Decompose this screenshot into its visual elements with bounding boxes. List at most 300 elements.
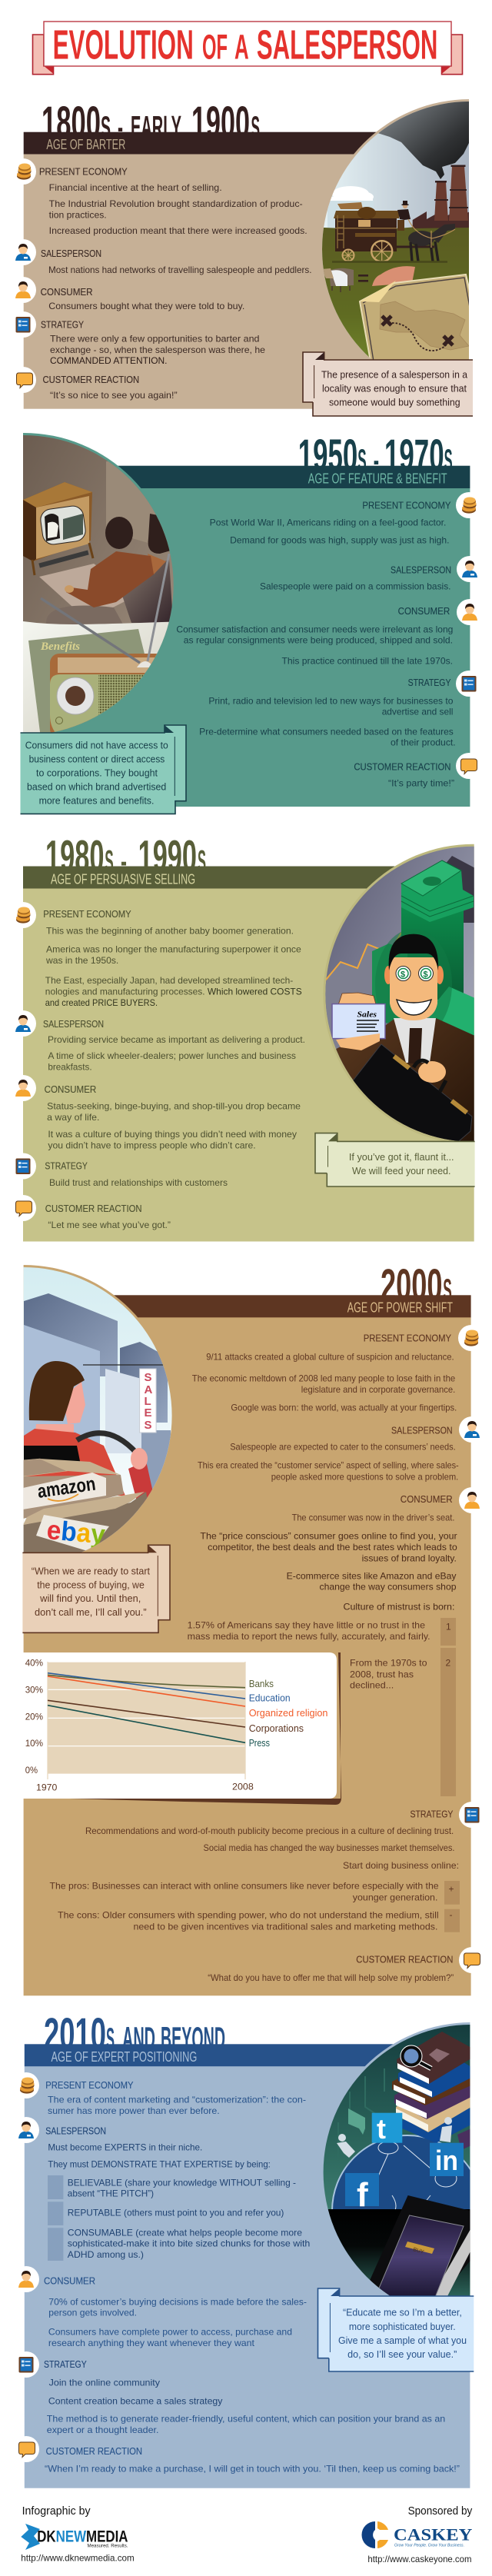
globe network <box>331 2135 470 2271</box>
callout: educate me: Give me a sample of what you <box>338 2335 467 2346</box>
section: 2010s and beyond <box>13 2009 492 2488</box>
text: consumer <box>44 2276 307 2348</box>
pros and cons: younger generation. <box>353 1892 437 1902</box>
callout: educate me: do, so I’ll see your value.” <box>347 2349 457 2360</box>
logo: caskey: CASKEY <box>394 2524 472 2544</box>
text: strategy: STRATEGY <box>41 319 85 330</box>
text: present economy: PRESENT ECONOMY <box>362 500 451 511</box>
text: customer reaction: “It’s so nice to see you again!” <box>50 390 178 401</box>
chart axis labels: 40% <box>25 1658 43 1669</box>
text: strategy: of their product. <box>391 737 456 748</box>
text: present economy: sumer has more power than ever before. <box>48 2105 220 2116</box>
chart axis labels: 10% <box>25 1738 43 1749</box>
heading: 1950s - 1970s: S <box>357 444 367 478</box>
sales sign: A <box>145 1383 152 1396</box>
callout: consumers did not have access: business content or direct access <box>29 754 165 764</box>
text: strategy <box>199 677 456 748</box>
stat 2: 2 <box>446 1658 450 1669</box>
ebay box <box>23 1492 148 1557</box>
suit, shirt and tie <box>333 1018 477 1146</box>
chart legend: Banks <box>249 1678 274 1689</box>
text: consumer <box>176 606 453 666</box>
callout: consumers did not have access: Consumers did not have access to <box>25 740 168 751</box>
pros and cons: - <box>449 1909 452 1920</box>
illustration: driver, sales sign and shipping boxes <box>23 1265 172 1552</box>
ebay box: ebay <box>45 1515 107 1550</box>
icon: consumer <box>10 1075 36 1101</box>
text: present economy: The Industrial Revolution brought standardization of produc- <box>49 198 303 209</box>
heading: 1950s - 1970s: - <box>374 444 379 478</box>
icon: salesperson <box>459 1416 485 1443</box>
text: present economy: This was the beginning of another baby boomer generation. <box>46 926 294 937</box>
chart legend: Education <box>249 1692 291 1704</box>
section: 1950s-1970s <box>0 431 483 814</box>
icon: strategy <box>10 1153 36 1180</box>
text: consumer: CONSUMER <box>44 2276 95 2287</box>
stat 1: 1.57% of Americans say they have little or no trust in the <box>188 1619 425 1630</box>
text: consumer: CONSUMER <box>398 606 450 617</box>
line chart: trust in institutions <box>0 1652 341 1805</box>
sales sign <box>140 1369 156 1433</box>
chart axis labels: 2008 <box>232 1781 254 1792</box>
text: consumer: 70% of customer’s buying decisions is made before the sales- <box>48 2296 307 2307</box>
text: present economy: The economic meltdown of 2008 led many people to lose faith in the <box>192 1373 455 1383</box>
expertise list: CONSUMABLE (create what helps people become more <box>68 2227 302 2238</box>
text: consumer: The “price conscious” consumer goes online to find you, your <box>200 1531 457 1542</box>
text: consumer: Consumers bought what they were told to buy. <box>48 301 244 311</box>
expertise list: sophisticated-make it into bite sized chunks for those with <box>68 2238 310 2249</box>
heading: 1950s - 1970s: 1970 <box>384 431 444 481</box>
stat 1: mass media to report the news fully, accurately, and fairly. <box>188 1631 430 1642</box>
text: consumer <box>45 1084 301 1151</box>
text: customer reaction: “It’s party time!” <box>388 778 454 789</box>
text: present economy: PRESENT ECONOMY <box>364 1333 452 1343</box>
text: customer reaction: CUSTOMER REACTION <box>43 374 139 385</box>
text: consumer: you didn’t have to impress people who didn’t care. <box>48 1140 256 1151</box>
icon: facebook <box>345 2173 379 2207</box>
sales sign: L <box>145 1395 151 1408</box>
footer: infographic credit: Infographic by <box>22 2504 91 2518</box>
callout: educate me <box>318 2288 474 2371</box>
icon: strategy <box>13 2351 39 2378</box>
text: strategy: Join the online community <box>49 2377 160 2388</box>
heading: 1980s - 1990s: - <box>121 844 127 878</box>
icon: coins <box>10 158 36 185</box>
text: strategy: STRATEGY <box>45 1160 88 1171</box>
heading bar: age of feature and benefit <box>108 466 470 488</box>
illustration: books, social media globe and smartphone <box>323 2022 470 2296</box>
callout: flaunt it: If you’ve got it, flaunt it... <box>349 1152 454 1163</box>
text: salesperson: people asked more questions to solve a problem. <box>271 1471 458 1482</box>
text: customer reaction <box>43 374 178 401</box>
magnifier <box>401 2045 431 2068</box>
sales card and hand <box>332 993 385 1050</box>
chart legend: Press <box>249 1737 270 1749</box>
icon: salesperson <box>457 556 483 582</box>
text: strategy: The method is to generate reader-friendly, useful content, which can position your brand as an <box>47 2413 445 2424</box>
text: consumer: CONSUMER <box>41 287 93 298</box>
heading: 1800s - early 1900s: 1800 <box>42 98 101 148</box>
pros and cons: The pros: Businesses can interact with online consumers like never before especially with the <box>49 1881 439 1892</box>
text: present economy: The era of content marketing and “customerization”: the con- <box>48 2094 306 2105</box>
text: strategy: Print, radio and television led to new ways for businesses to <box>208 695 454 706</box>
sales card and hand: Sales <box>357 1010 377 1020</box>
text: consumer <box>200 1494 457 1612</box>
chart axis labels: 20% <box>25 1711 43 1722</box>
text: salesperson <box>43 1019 305 1072</box>
speech bubble <box>348 2108 365 2135</box>
text: present economy: was in the 1950s. <box>45 955 118 966</box>
callout: presence of a salesperson: The presence of a salesperson in a <box>321 370 467 381</box>
text: consumer: research anything they want whenever they want <box>48 2338 255 2348</box>
callout: educate me: more sophisticated buyer. <box>349 2321 456 2332</box>
icon: coins <box>10 902 36 928</box>
text: consumer: as regular consignments were being produced, shipped and sold. <box>184 635 453 646</box>
man and woman <box>48 514 172 624</box>
icon: consumer <box>459 1487 485 1513</box>
text: present economy: nologies and manufacturing processes. Which lowered COSTS <box>45 986 302 997</box>
logo: dk new media <box>21 2524 128 2550</box>
icon: consumer <box>13 2266 39 2292</box>
title banner <box>32 22 463 75</box>
amazon box: amazon <box>36 1473 97 1503</box>
text: strategy: STRATEGY <box>411 1809 454 1819</box>
smartphone: BUY <box>412 2247 425 2255</box>
text: salesperson: SALESPERSON <box>45 2126 106 2137</box>
text: consumer: The consumer was now in the driver’s seat. <box>292 1512 454 1523</box>
text: present economy: PRESENT ECONOMY <box>45 2080 134 2091</box>
text: salesperson: SALESPERSON <box>391 1426 453 1436</box>
heading: 1800s - early 1900s: S <box>101 111 111 145</box>
icon: reaction <box>13 2436 39 2462</box>
section: 2000s: S <box>443 1273 452 1307</box>
text: salesperson: breakfasts. <box>48 1061 92 1072</box>
people <box>337 2117 452 2158</box>
icon: salesperson <box>13 2117 39 2143</box>
heading bar: age of power shift <box>108 1295 471 1317</box>
text: present economy: Increased production meant that there were increased goods. <box>49 225 308 236</box>
horse <box>332 219 455 261</box>
text: consumer: Status-seeking, binge-buying, and shop-till-you drop became <box>47 1101 301 1112</box>
icon: twitter: t <box>377 2113 386 2145</box>
icon: consumer <box>10 277 36 303</box>
stat 2 <box>350 1648 456 1796</box>
wagon <box>334 201 434 261</box>
text: strategy: Build trust and relationships with customers <box>49 1177 228 1188</box>
stat 1 <box>188 1618 456 1646</box>
text: present economy: Demand for goods was high, supply was just as high. <box>230 535 449 546</box>
briefcase <box>351 1044 472 1146</box>
text: present economy: America was no longer the manufacturing superpower it once <box>46 944 301 955</box>
text: present economy: legislature and in corporate governance. <box>301 1384 455 1395</box>
expertise list: REPUTABLE (others must point to you and refer you) <box>68 2207 284 2218</box>
text: customer reaction: “What do you have to offer me that will help solve my problem?” <box>208 1972 454 1983</box>
amazon box <box>23 1459 124 1519</box>
panel: feature and benefit background <box>23 488 470 807</box>
expertise list: ADHD among us.) <box>68 2249 144 2260</box>
callout: presence of a salesperson: someone would buy something <box>329 398 460 408</box>
callout: when we are ready: the process of buying, we <box>37 1579 145 1590</box>
text: consumer <box>41 287 244 311</box>
callout: consumers did not have access: based on which brand advertised <box>27 781 166 792</box>
heading: 2010s and beyond: S <box>106 2022 115 2056</box>
heading bar: age of persuasive selling <box>23 866 400 889</box>
text: consumer: change the way consumers shop <box>320 1582 457 1593</box>
text: strategy <box>85 1809 459 1871</box>
text: strategy: Social media has changed the way businesses market themselves. <box>203 1842 454 1853</box>
stat 2: 2008, trust has <box>350 1669 414 1679</box>
paper and radio: Benefits <box>40 641 80 653</box>
footer: infographic credit <box>21 2504 135 2564</box>
heading bar: age of expert positioning: AGE OF EXPERT POSITIONING <box>51 2049 197 2065</box>
text: strategy: COMMANDED ATTENTION. <box>50 355 168 366</box>
text: present economy: PRESENT ECONOMY <box>39 166 128 177</box>
section: 1800s early 1900s <box>10 96 492 416</box>
callout: when we are ready: will find you. Until then, <box>39 1593 141 1604</box>
text: strategy: STRATEGY <box>408 677 451 688</box>
text: consumer: It was a culture of buying things you didn’t need with money <box>48 1129 297 1140</box>
callout: consumers did not have access: more features and benefits. <box>39 795 154 806</box>
head <box>384 934 444 1020</box>
pros and cons <box>49 1881 460 1932</box>
text: salesperson <box>198 1426 459 1482</box>
panel: barter background <box>24 154 469 409</box>
text: present economy: tion practices. <box>49 210 107 221</box>
text: consumer: Consumers have complete power to access, purchase and <box>48 2327 292 2338</box>
chart axis labels: 1970 <box>36 1782 58 1792</box>
expertise list <box>48 2175 310 2261</box>
footer: sponsor credit <box>361 2504 473 2564</box>
text: strategy: Start doing business online: <box>343 1860 459 1871</box>
icon: facebook: f <box>357 2176 368 2214</box>
tv <box>23 482 125 607</box>
expertise list: BELIEVABLE (share your knowledge WITHOUT selling - <box>68 2177 296 2188</box>
heading: 1800s - early 1900s: 1900 <box>191 98 250 148</box>
table <box>327 2209 470 2296</box>
section: 1800s early 1900s: S <box>251 111 260 145</box>
icon: strategy <box>10 311 36 338</box>
callout: consumers did not have access: to corporations. They bought <box>36 768 158 779</box>
heading: 1980s - 1990s: 1990 <box>138 832 197 881</box>
callout: when we are ready: don’t call me, I’ll call you.” <box>35 1607 147 1618</box>
text: strategy <box>41 319 265 366</box>
icon: coins <box>456 492 482 518</box>
icon: linkedin: in <box>435 2145 458 2176</box>
heading: 1980s - 1990s: S <box>105 844 114 878</box>
text: consumer: E-commerce sites like Amazon and eBay <box>287 1570 457 1581</box>
text: consumer: Culture of mistrust is born: <box>343 1602 454 1612</box>
text: present economy <box>39 166 308 236</box>
stat 2: From the 1970s to <box>350 1658 427 1669</box>
text: salesperson: Providing service became as important as delivering a product. <box>48 1034 305 1045</box>
callout: when we are ready <box>22 1545 170 1632</box>
text: strategy: There were only a few opportunities to barter and <box>50 333 260 344</box>
icon: reaction <box>10 367 36 393</box>
text: present economy: Google was born: the world, was actually at your fingertips. <box>231 1402 457 1413</box>
heading: 2010s and beyond: 2010 <box>44 2009 106 2059</box>
text: salesperson: SALESPERSON <box>41 248 101 259</box>
stat 1: 1 <box>446 1621 451 1632</box>
icon: coins <box>13 2072 39 2098</box>
heading bar: age of expert positioning <box>25 2044 401 2066</box>
logo: dk new media: Measured. Results. <box>88 2544 128 2548</box>
chart legend: Organized religion <box>249 1707 327 1719</box>
text: customer reaction <box>45 1203 171 1230</box>
text: salesperson: Salespeople are expected to cater to the consumers’ needs. <box>230 1442 456 1453</box>
heading bar: age of barter <box>24 132 385 154</box>
heading bar: age of barter: AGE OF BARTER <box>46 137 125 152</box>
heading: 2000s: 2000 <box>381 1260 443 1310</box>
section: 1980s-1990s: S <box>198 844 206 878</box>
chart axis labels <box>25 1658 254 1792</box>
section: 1980s-1990s <box>10 832 492 1241</box>
text: present economy: The East, especially Japan, had developed streamlined tech- <box>45 975 293 986</box>
chart legend <box>249 1678 327 1749</box>
callout: consumers did not have access <box>20 725 186 814</box>
text: consumer: CONSUMER <box>45 1084 96 1095</box>
callout: educate me: “Educate me so I’m a better, <box>343 2308 462 2318</box>
icon: reaction <box>459 1947 485 1973</box>
text: consumer: a way of life. <box>47 1112 99 1123</box>
footer: sponsor credit: http://www.caskeyone.com <box>367 2554 472 2564</box>
text: customer reaction: CUSTOMER REACTION <box>45 1203 141 1214</box>
text: present economy <box>45 2080 306 2116</box>
smartphone <box>370 2195 470 2296</box>
text: salesperson: SALESPERSON <box>43 1019 104 1030</box>
panel: power shift background <box>24 1317 471 1995</box>
chart axis labels: 30% <box>25 1685 43 1696</box>
icon: strategy <box>459 1802 485 1828</box>
text: salesperson <box>260 564 451 591</box>
text: strategy: STRATEGY <box>44 2359 87 2370</box>
heading: 1980s - 1990s: 1980 <box>45 832 105 881</box>
logo: caskey: Grow Your People. Grow Your Business. <box>394 2543 464 2548</box>
text: salesperson: They must DEMONSTRATE THAT EXPERTISE by being: <box>48 2159 271 2170</box>
pros and cons: The cons: Older consumers with spending power, who do not understand the medium, still <box>58 1910 439 1921</box>
icon: coins <box>458 1325 484 1351</box>
pros and cons: + <box>449 1884 454 1895</box>
text: strategy: expert or a thought leader. <box>47 2425 158 2435</box>
callout: flaunt it <box>315 1133 475 1186</box>
footer: sponsor credit: Sponsored by <box>408 2504 473 2518</box>
text: customer reaction: CUSTOMER REACTION <box>356 1955 453 1965</box>
callout: presence of a salesperson <box>303 352 473 416</box>
icon: consumer <box>457 599 483 625</box>
text: strategy: Recommendations and word-of-mouth publicity become precious in a culture of declining trust. <box>85 1825 454 1836</box>
text: present economy <box>192 1333 457 1413</box>
sales sign: S <box>145 1419 152 1432</box>
icon: strategy <box>456 671 482 697</box>
text: salesperson <box>41 248 312 275</box>
text: customer reaction: CUSTOMER REACTION <box>46 2446 142 2457</box>
text: salesperson: This era created the “customer service” aspect of selling, where sales- <box>198 1460 459 1471</box>
callout: flaunt it: We will feed your need. <box>352 1166 450 1177</box>
text: present economy <box>210 500 451 546</box>
heading: 2010s and beyond: AND <box>122 2020 155 2056</box>
text: salesperson: SALESPERSON <box>391 564 451 575</box>
title text: EVOLUTION <box>53 22 194 68</box>
treasure map <box>360 275 474 361</box>
text: customer reaction: CUSTOMER REACTION <box>354 761 450 772</box>
text: strategy: exchange - so, when the salesperson was there, he <box>50 344 265 355</box>
text: consumer: competitor, the best deals and the best rates which leads to <box>208 1542 457 1553</box>
illustration: family watching television and radio <box>23 433 174 732</box>
panel: persuasive selling background <box>23 888 474 1241</box>
text: customer reaction <box>208 1955 454 1983</box>
icon: salesperson <box>10 1010 36 1037</box>
text: strategy <box>44 2359 445 2435</box>
text: salesperson: Most nations had networks of travelling salespeople and peddlers. <box>48 265 312 275</box>
text: salesperson <box>45 2126 271 2170</box>
callout: when we are ready: “When we are ready to start <box>32 1566 151 1576</box>
section: 1950s-1970s: S <box>444 444 453 478</box>
text: consumer: CONSUMER <box>401 1494 453 1505</box>
text: present economy: PRESENT ECONOMY <box>43 909 131 920</box>
text: present economy: 9/11 attacks created a global culture of suspicion and reluctance. <box>206 1351 454 1362</box>
expertise list: absent “THE PITCH”) <box>68 2188 154 2199</box>
paper and radio <box>23 554 171 732</box>
book stack <box>392 2032 471 2150</box>
text: consumer: This practice continued till the late 1970s. <box>281 655 453 666</box>
text: consumer: Consumer satisfaction and consumer needs were irrelevant as long <box>176 624 453 635</box>
illustration: peddler wagon, factory and treasure map <box>322 99 469 360</box>
stat 2: declined... <box>350 1679 394 1690</box>
text: strategy: Pre-determine what consumers needed based on the features <box>199 726 454 737</box>
panel: expert positioning background <box>25 2066 470 2488</box>
title text: A <box>234 28 249 66</box>
text: present economy: Financial incentive at the heart of selling. <box>49 182 222 193</box>
logo: dk new media: DKNEWMEDIA <box>37 2528 128 2546</box>
text: strategy <box>45 1160 228 1188</box>
callout: presence of a salesperson: locality was enough to ensure that <box>322 384 467 394</box>
text: strategy: advertise and sell <box>382 707 453 717</box>
heading bar: age of persuasive selling: AGE OF PERSUASIVE SELLING <box>51 872 195 887</box>
head: $ <box>401 970 405 980</box>
text: salesperson: A time of slick wheeler-dealers; power lunches and business <box>48 1050 296 1061</box>
driver <box>24 1361 154 1507</box>
barter animals <box>321 266 415 292</box>
footer: infographic credit: http://www.dknewmedia.com <box>21 2553 135 2564</box>
text: consumer: issues of brand loyalty. <box>362 1553 457 1563</box>
chart legend: Corporations <box>249 1722 304 1734</box>
text: present economy <box>43 909 302 1008</box>
text: strategy: Content creation became a sales strategy <box>48 2396 222 2407</box>
icon: salesperson <box>10 239 36 265</box>
text: present economy: and created PRICE BUYERS. <box>45 997 158 1008</box>
text: customer reaction <box>354 761 454 789</box>
text: consumer: person gets involved. <box>48 2308 137 2318</box>
section: 2010s and beyond: BEYOND <box>161 2020 225 2056</box>
heading: 1950s - 1970s: 1950 <box>298 431 357 481</box>
pros and cons: need to be given incentives via traditional sales and marketing methods. <box>134 1921 437 1932</box>
illustration: salesman with money eyes <box>323 844 474 1141</box>
text: customer reaction: “When I’m ready to make a purchase, I will get in touch with you. ‘Til then, keep us coming back!” <box>45 2463 460 2474</box>
icon: reaction <box>10 1195 36 1221</box>
section: 2000s <box>0 1260 485 1995</box>
icon: reaction <box>456 753 482 779</box>
heading: 1800s - early 1900s: EARLY <box>131 109 181 145</box>
text: salesperson: Salespeople were paid on a commission basis. <box>260 581 450 591</box>
head: $ <box>423 970 428 980</box>
text: customer reaction: “Let me see what you’ve got.” <box>48 1220 171 1230</box>
icon: linkedin <box>430 2143 464 2176</box>
text: customer reaction <box>45 2446 460 2474</box>
heading: 1800s - early 1900s: - <box>118 111 123 145</box>
logo: caskey <box>361 2521 472 2548</box>
sales sign: E <box>145 1406 152 1419</box>
chart axis labels: 0% <box>25 1765 38 1776</box>
title text: OF <box>202 28 228 66</box>
